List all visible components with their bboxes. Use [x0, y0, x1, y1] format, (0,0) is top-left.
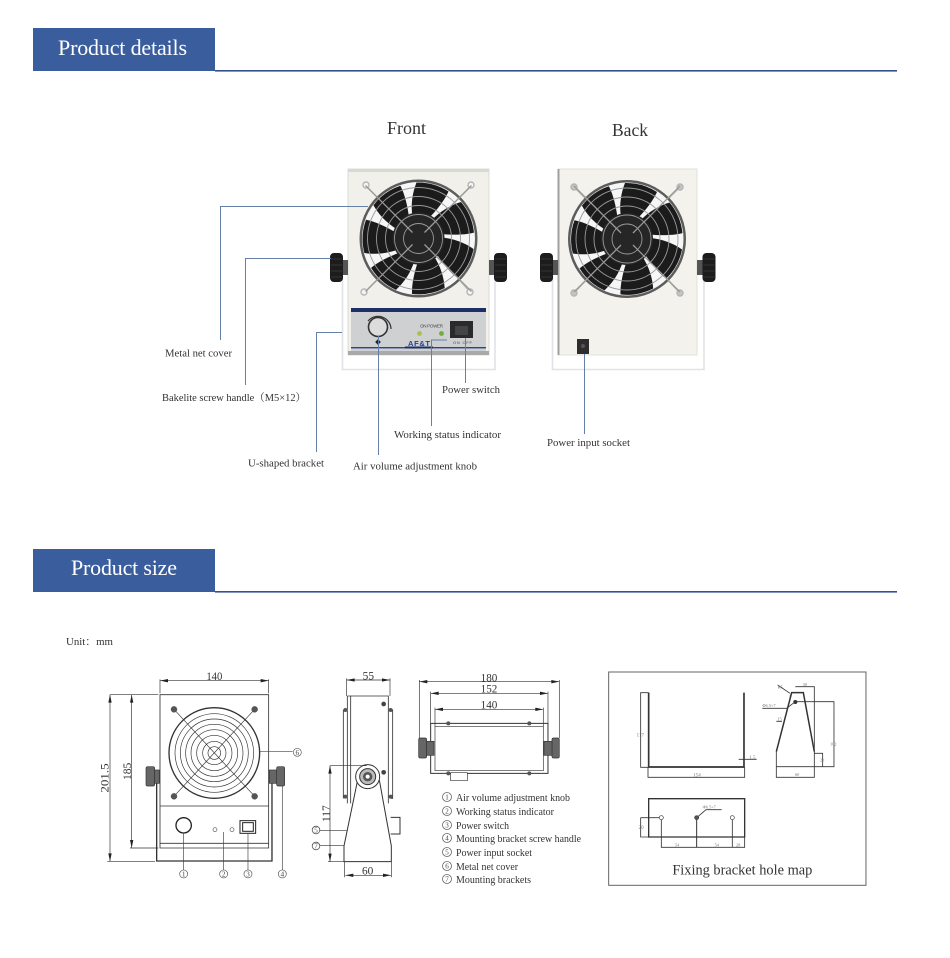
side view dimensions	[317, 678, 391, 877]
legend: numbered parts list: Power switch	[456, 821, 510, 832]
leader: air volume knob	[378, 336, 380, 455]
U-shaped bracket, front	[342, 276, 495, 370]
legend: numbered parts list: 5	[445, 848, 449, 856]
bracket side drawing: 20	[820, 758, 824, 763]
dimension values: 140	[206, 669, 222, 683]
legend: numbered parts list: Mounting bracket screw handle	[456, 834, 581, 845]
dimension values	[98, 669, 222, 793]
bracket hole layout	[639, 799, 745, 847]
knobs	[146, 767, 285, 786]
label: metal net cover: Metal net cover	[165, 348, 232, 360]
leader: U-shaped bracket	[316, 332, 342, 452]
U-bracket front drawing: 154	[693, 773, 701, 778]
leader: power input socket	[584, 354, 586, 434]
legend: numbered parts list: 3	[445, 822, 449, 830]
bakelite knobs, back	[540, 253, 716, 282]
legend: numbered parts list: Power input socket	[456, 848, 532, 859]
legend: numbered parts list: Metal net cover	[456, 862, 518, 873]
leader: bakelite screw handle	[246, 258, 331, 385]
label: power switch: Power switch	[442, 384, 501, 396]
U-shaped bracket, back	[552, 276, 704, 370]
bracket side drawing: 60	[795, 772, 799, 777]
fan and net cover, front	[357, 180, 481, 302]
body outline	[160, 695, 269, 848]
control panel	[348, 308, 489, 355]
front view of ionizing fan	[330, 169, 507, 370]
callouts 5 and 7 beside side view	[312, 826, 320, 850]
legend numbers	[442, 792, 452, 884]
bakelite knobs, front	[330, 253, 507, 282]
legend: numbered parts list: Mounting brackets	[456, 875, 531, 886]
top view dimension values: 180	[481, 670, 497, 684]
top view dimension values: 140	[481, 698, 497, 712]
legend: numbered parts list: 7	[445, 876, 449, 884]
controls	[176, 751, 293, 870]
fan and net cover, back	[566, 180, 689, 302]
bracket hole layout: Φ6.5×7	[703, 805, 717, 810]
callouts 5 and 7 beside side view: 5	[314, 826, 318, 834]
heading: Product details	[33, 28, 897, 72]
control panel: AF&T	[408, 339, 430, 348]
legend: numbered parts list	[442, 792, 581, 886]
control panel: ON POWER	[420, 324, 444, 328]
bracket hole layout: 28	[736, 842, 740, 847]
bracket side drawing: Φ6.5×7	[762, 703, 776, 708]
leader: metal net cover	[220, 206, 368, 340]
bracket hole layout: 54	[675, 842, 680, 847]
numbered callouts	[180, 748, 301, 879]
dimension drawing: side and top views	[317, 668, 559, 878]
U-bracket front drawing: 117	[637, 734, 644, 739]
leader: power switch	[464, 338, 466, 383]
side view dimension values: 117	[319, 805, 333, 822]
side view dimension values	[319, 668, 374, 878]
power input socket	[577, 339, 589, 354]
net cover	[169, 706, 260, 799]
bracket side drawing: 15	[777, 717, 782, 722]
U-bracket front drawing	[637, 693, 757, 778]
numbered callouts: 4	[280, 870, 284, 879]
panel: fixing bracket hole map	[609, 672, 866, 885]
caption: Fixing bracket hole map	[672, 863, 812, 879]
mounting screws, front	[361, 182, 474, 295]
numbered callouts: 2	[222, 870, 226, 879]
U-bracket front drawing: 1.5	[749, 756, 756, 761]
top view dimension values	[481, 670, 497, 712]
legend: numbered parts list: 6	[445, 862, 449, 870]
heading: Product details: Product details	[58, 35, 187, 60]
legend: numbered parts list: 1	[445, 794, 449, 802]
side view	[343, 696, 400, 862]
dimension lines	[107, 679, 269, 861]
device body, back	[558, 169, 697, 355]
heading: Back: Back	[612, 120, 648, 140]
numbered callouts: 3	[246, 870, 250, 879]
label: working status indicator: Working status indicator	[394, 429, 501, 441]
bracket side drawing: R5	[778, 685, 783, 690]
dimension values: 201.5	[98, 763, 112, 793]
bracket hole layout: 54	[715, 842, 720, 847]
callouts 5 and 7 beside side view: 7	[314, 842, 318, 850]
top view	[419, 721, 559, 781]
heading: Product size: Product size	[71, 555, 177, 580]
label: bakelite screw handle: Bakelite screw handle（M5×12）	[162, 391, 306, 404]
numbered callouts: 6	[295, 748, 299, 757]
legend: numbered parts list: Working status indicator	[456, 807, 554, 818]
dimension values: 185	[120, 763, 134, 780]
legend: numbered parts list: Air volume adjustment knob	[456, 793, 570, 804]
mounting screws, back	[571, 184, 683, 296]
dimension drawing: front view	[98, 669, 301, 879]
label: power input socket: Power input socket	[547, 437, 630, 449]
bracket hole layout: 20	[639, 826, 644, 831]
unit note: Unit：mm	[66, 636, 114, 648]
legend: numbered parts list: 4	[445, 834, 449, 842]
top view dimensions	[419, 680, 559, 738]
bracket side drawing	[762, 682, 836, 777]
label: U-shaped bracket: U-shaped bracket	[248, 458, 324, 470]
heading: Product size	[33, 549, 897, 593]
legend: numbered parts list: 2	[445, 808, 449, 816]
leader: working status indicator	[432, 340, 447, 426]
control panel: ON OFF	[453, 340, 473, 345]
side view dimension values: 55	[363, 668, 374, 682]
heading: Front: Front	[387, 118, 426, 138]
top view dimension values: 152	[481, 682, 497, 696]
bracket side drawing: 102	[830, 741, 836, 746]
side view dimension values: 60	[362, 864, 373, 878]
numbered callouts: 1	[182, 870, 186, 879]
label: air volume knob: Air volume adjustment knob	[353, 460, 477, 472]
bracket side drawing: 30	[803, 682, 807, 687]
U bracket	[157, 775, 272, 861]
back view of ionizing fan	[540, 169, 716, 370]
device body, front	[348, 169, 489, 355]
